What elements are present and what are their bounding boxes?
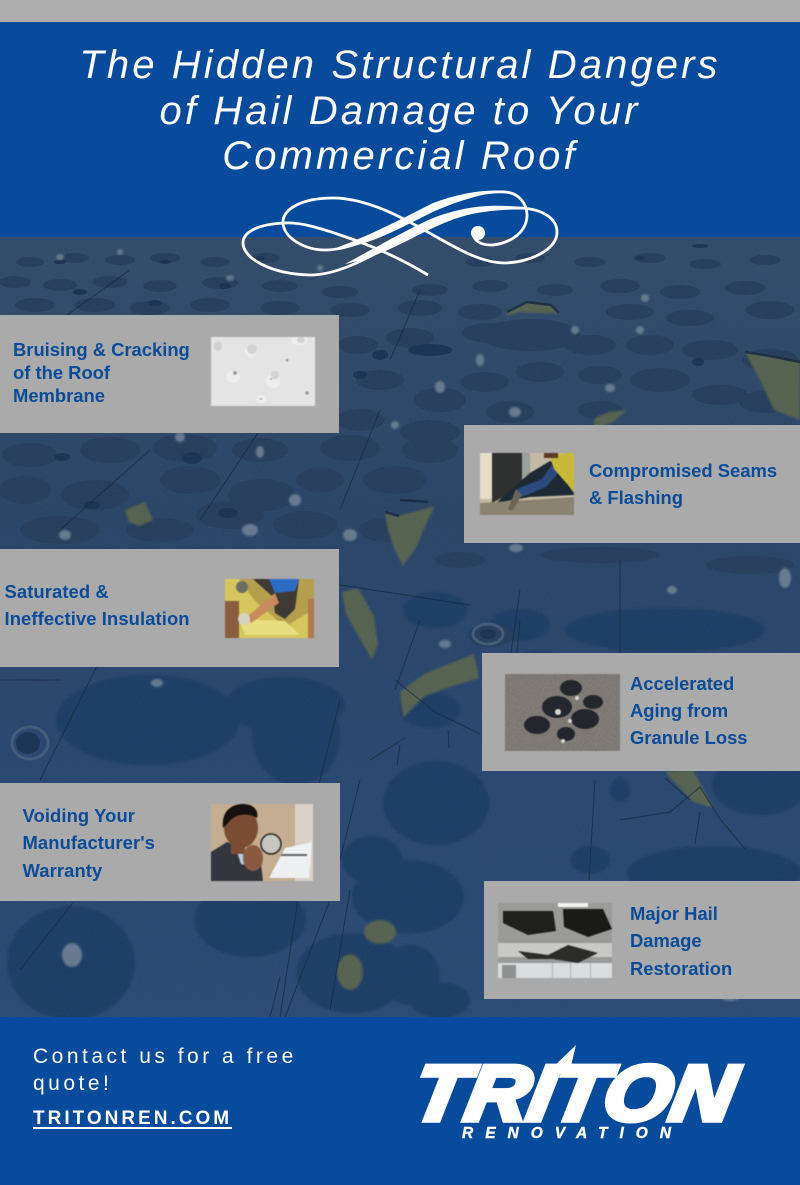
photo: dented white membrane (210, 336, 316, 406)
fine surface grain (0, 237, 800, 1017)
panel: accelerated aging (482, 653, 800, 771)
logo: Triton Renovation (407, 1045, 746, 1142)
decorative flourish (242, 190, 558, 276)
background photo: hail damaged roof (0, 237, 800, 1017)
logo lightning bolt (546, 1045, 576, 1074)
heading: bruising and cracking: Bruising & Cracking (13, 338, 190, 360)
heading: compromised seams: Compromised Seams (589, 460, 777, 481)
contact call to action: quote! (33, 1072, 112, 1095)
photo: collapsed ceiling (498, 902, 612, 978)
panel: saturated insulation (0, 549, 339, 667)
title: Commercial Roof (222, 134, 578, 178)
title: of Hail Damage to Your (159, 88, 641, 132)
heading: accelerated aging: Aging from (630, 700, 728, 721)
heading: saturated insulation: Saturated & (4, 580, 109, 602)
small hail craters: dark rings (0, 253, 798, 647)
crater pits and hail debris (16, 244, 708, 967)
heading: major hail restoration: Restoration (630, 958, 732, 979)
heading: major hail restoration (630, 903, 732, 979)
heading: major hail restoration: Damage (630, 930, 702, 951)
heading: bruising and cracking: of the Roof (13, 362, 110, 382)
heading: saturated insulation: Ineffective Insulation (4, 608, 190, 629)
heading: bruising and cracking (13, 338, 190, 406)
title: The Hidden Structural Dangers (79, 43, 721, 87)
heading: accelerated aging (630, 672, 748, 748)
large dark hail circles (7, 592, 800, 1020)
heading: bruising and cracking: Membrane (13, 384, 105, 406)
logo tagline: RENOVATION (462, 1125, 672, 1142)
heading: voiding warranty: Manufacturer's (22, 832, 155, 853)
heading: voiding warranty: Warranty (22, 860, 102, 881)
heading: compromised seams: & Flashing (589, 487, 683, 508)
heading: accelerated aging: Accelerated (630, 672, 734, 694)
heading: saturated insulation (4, 580, 190, 629)
exposed insulation patches and cracks (125, 302, 800, 990)
heading: voiding warranty: Voiding Your (22, 805, 135, 826)
title banner (0, 22, 800, 238)
panel: compromised seams (464, 425, 800, 543)
contact call to action (33, 1045, 297, 1095)
footer band (0, 1017, 800, 1185)
contact call to action: Contact us for a free (33, 1045, 297, 1068)
photo: worker checking flashing (480, 452, 575, 516)
heading: major hail restoration: Major Hail (630, 903, 718, 924)
top grey strip (0, 0, 800, 22)
website link: TRITONREN.COM (33, 1108, 232, 1129)
photo: woman inspecting document (210, 803, 314, 882)
panel: voiding warranty (0, 783, 340, 901)
photo: shingle with granule loss (504, 674, 620, 752)
heading: accelerated aging: Granule Loss (630, 727, 748, 748)
panel: major hail restoration (484, 881, 800, 999)
title (79, 43, 721, 178)
panel: bruising and cracking (0, 315, 339, 433)
photo: worker handling insulation (224, 578, 315, 639)
heading: compromised seams (589, 460, 777, 508)
logo wordmark: TRITON (407, 1050, 745, 1137)
heading: voiding warranty (22, 805, 155, 881)
